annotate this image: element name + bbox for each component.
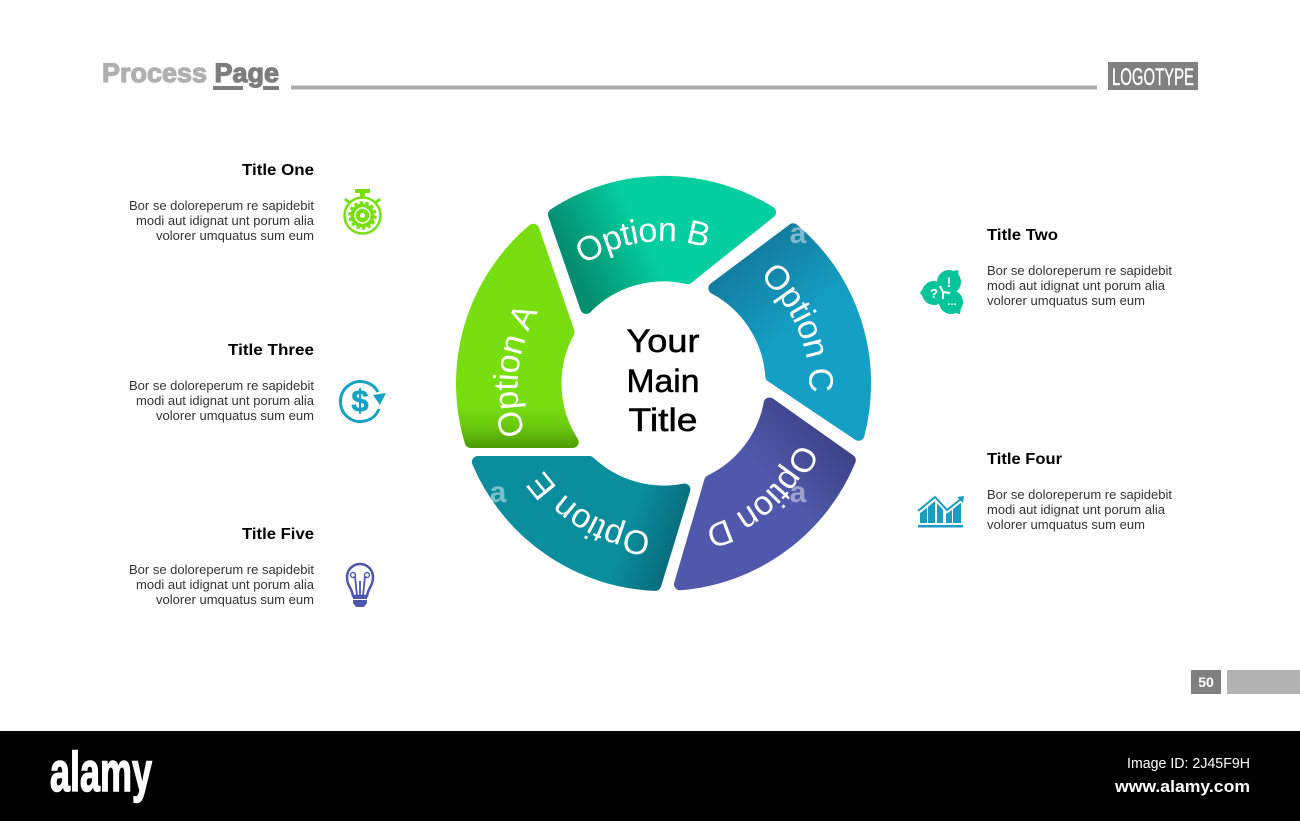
icon: dollar with circular arrow [340,382,386,422]
icon: speech bubbles: ... [947,296,957,308]
text: Title One: Bor se doloreperum re sapidebit [129,198,314,213]
text: Title Four: volorer umquatus sum eum [987,517,1145,532]
icon: dollar with circular arrow: $ [351,383,369,418]
text: Title Two: Title Two [987,227,1058,244]
label: Option E: Option E [526,471,648,554]
label: Option D: Option D [709,448,816,546]
page number bar [1227,670,1300,694]
watermark marks: a [490,476,507,509]
page number: 50 [1198,674,1214,690]
text: Title Three: Title Three [228,342,314,359]
logotype badge [1108,62,1198,91]
center title: Title [628,402,698,438]
block: Title Five [129,526,373,607]
text: Title Five: volorer umquatus sum eum [156,592,314,607]
segment: Option D [680,404,850,584]
watermark marks: a [790,476,807,509]
text: Title Two: Bor se doloreperum re sapidebit [987,263,1172,278]
segment: Option C [714,229,865,435]
icon: rising bar chart [918,496,964,528]
watermark marks [490,217,807,509]
text: Title Three [129,342,315,423]
label: Option B: Option B [577,219,708,260]
text: Title One: volorer umquatus sum eum [156,228,314,243]
text: Title Two: volorer umquatus sum eum [987,293,1145,308]
text: Title One: Title One [242,162,314,179]
icon: speech bubbles: ! [947,274,951,290]
text: Title One: modi aut idignat unt porum alia [136,213,315,228]
image id: Image ID: 2J45F9H [1127,756,1250,772]
label: Option A: Option A [493,310,538,436]
icon: speech bubbles [920,270,963,314]
footer band [0,731,1300,821]
text: Title Four: Title Four [987,451,1062,468]
page header [102,58,1198,91]
text: Title Four: Bor se doloreperum re sapidebit [987,487,1172,502]
heading underline [213,86,279,90]
icon: light bulb [347,564,373,607]
center title [626,323,700,438]
block: Title Three [129,342,386,423]
block: Title Four [918,451,1172,532]
label: Option C: Option C [765,265,834,392]
text: Title One [129,162,315,243]
text: Title Two [987,227,1172,308]
text: Title Five: Title Five [242,526,314,543]
text: Title Five: Bor se doloreperum re sapidebit [129,562,314,577]
text: Title Three: modi aut idignat unt porum alia [136,393,315,408]
block: Title One [129,162,380,243]
text: Title Five [129,526,315,607]
watermark marks: a [790,217,807,250]
text: Title Four [987,451,1172,532]
icon: speech bubbles: ? [930,286,938,301]
page number [1191,670,1221,694]
site url: www.alamy.com [1114,778,1250,796]
text: Title Five: modi aut idignat unt porum alia [136,577,315,592]
block: Title Two [920,227,1172,314]
text: Title Two: modi aut idignat unt porum alia [987,278,1166,293]
center title: Main [626,363,700,399]
cycle diagram [456,176,872,591]
text: Title Three: volorer umquatus sum eum [156,408,314,423]
segment: Option E [478,462,684,585]
center title: Your [626,323,700,359]
logotype badge: LOGOTYPE [1112,64,1194,91]
icon: stopwatch gear [344,189,380,234]
heading: Process Page: Process Page [102,58,279,88]
text: Title Three: Bor se doloreperum re sapidebit [129,378,314,393]
alamy logo: alamy [50,740,152,803]
segment: Option A [462,230,573,442]
segment: Option B [554,182,770,308]
text: Title Four: modi aut idignat unt porum alia [987,502,1166,517]
header rule [291,86,1097,90]
